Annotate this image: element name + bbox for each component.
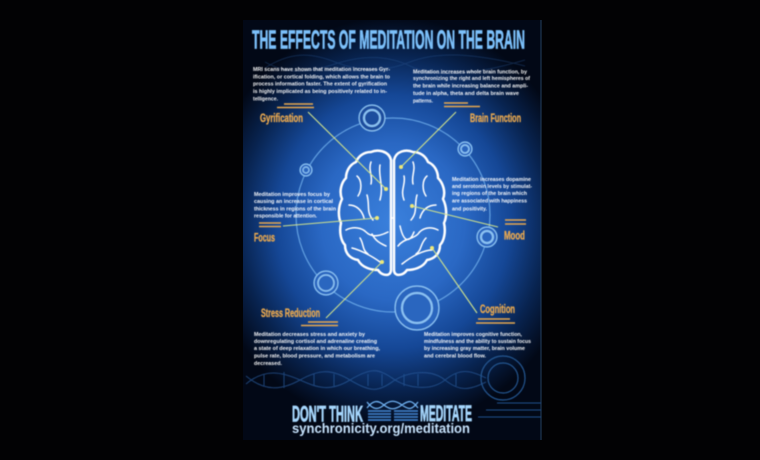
text: stress description: a state of deep relaxation in which our breathing, xyxy=(254,346,380,352)
label: Gyrification: Gyrification xyxy=(260,111,303,125)
footer: DON'T THINK: DON'T THINK xyxy=(292,402,363,426)
text: gyrification description: MRI scans have shown that meditation increases Gyr- xyxy=(253,67,390,73)
connector dots xyxy=(375,165,434,264)
bottom-right lines xyxy=(478,403,541,417)
text: focus description: causing an increase in cortical xyxy=(254,199,333,205)
text: stress description: downregulating cortisol and adrenaline creating xyxy=(254,339,378,345)
DNA strand decoration xyxy=(246,371,486,389)
text: mood description: and serotonin levels by stimulat- xyxy=(452,184,532,190)
brain xyxy=(339,151,446,275)
text: cognition description: Meditation improves cognitive function, xyxy=(424,332,522,338)
text: cognition description: and cerebral blood flow. xyxy=(424,354,486,360)
right hemisphere xyxy=(394,151,446,275)
label: Stress Reduction: Stress Reduction xyxy=(261,306,320,320)
poster panel xyxy=(243,20,541,440)
right edge line xyxy=(540,20,542,440)
text: mood description: and positivity. xyxy=(452,206,487,212)
text: gyrification description: process information faster. The extent of gyrification xyxy=(253,82,388,88)
left hemisphere xyxy=(339,151,391,275)
orbit nodes xyxy=(300,105,497,330)
text: cognition description: mindfulness and the ability to sustain focus xyxy=(424,339,531,345)
text: brain function description: synchronizing the right and left hemispheres of xyxy=(413,76,530,82)
text: mood description: are associated with happiness xyxy=(452,198,527,204)
label bars xyxy=(259,103,526,326)
label: Mood: Mood xyxy=(504,228,525,242)
text: stress description: decreased. xyxy=(254,361,282,367)
text: brain function description: patterns. xyxy=(413,98,433,104)
label: Cognition: Cognition xyxy=(480,302,515,316)
footer: URL: synchronicity.org/meditation xyxy=(292,421,470,436)
top DNA decoration xyxy=(265,55,525,74)
text: focus description: responsible for attention. xyxy=(254,214,317,220)
text: mood description: Meditation increases dopamine xyxy=(452,177,531,183)
text: brain function description: tude in alpha, theta and delta brain wave xyxy=(413,91,519,97)
text: mood description: ing regions of the brain which xyxy=(452,191,528,197)
text: gyrification description: telligence. xyxy=(253,96,278,102)
text: brain function description: Meditation increases whole brain function, by xyxy=(413,70,528,76)
text: focus description: thickness in regions of the brain xyxy=(254,206,337,212)
bottom-right ring decoration xyxy=(481,356,525,400)
centre split xyxy=(391,217,394,219)
text: brain function description: the brain while increasing balance and ampli- xyxy=(413,84,528,90)
footer DNA icon xyxy=(367,401,418,420)
text: gyrification description: is highly implicated as being positively related to in- xyxy=(253,89,387,95)
text: stress description: Meditation decreases stress and anxiety by xyxy=(254,332,366,338)
infographic canvas: MEDITATE xyxy=(420,401,472,426)
label: Brain Function: Brain Function xyxy=(470,111,521,125)
label: Focus: Focus xyxy=(254,230,275,244)
text: focus description: Meditation improves focus by xyxy=(254,192,331,198)
text: gyrification description: ification, or cortical folding, which allows the brain to xyxy=(253,74,391,80)
connector lines xyxy=(283,112,498,318)
orbit ring xyxy=(296,118,490,312)
text: cognition description: by increasing gray matter, brain volume xyxy=(424,346,525,352)
text: stress description: pulse rate, blood pressure, and metabolism are xyxy=(254,354,375,360)
